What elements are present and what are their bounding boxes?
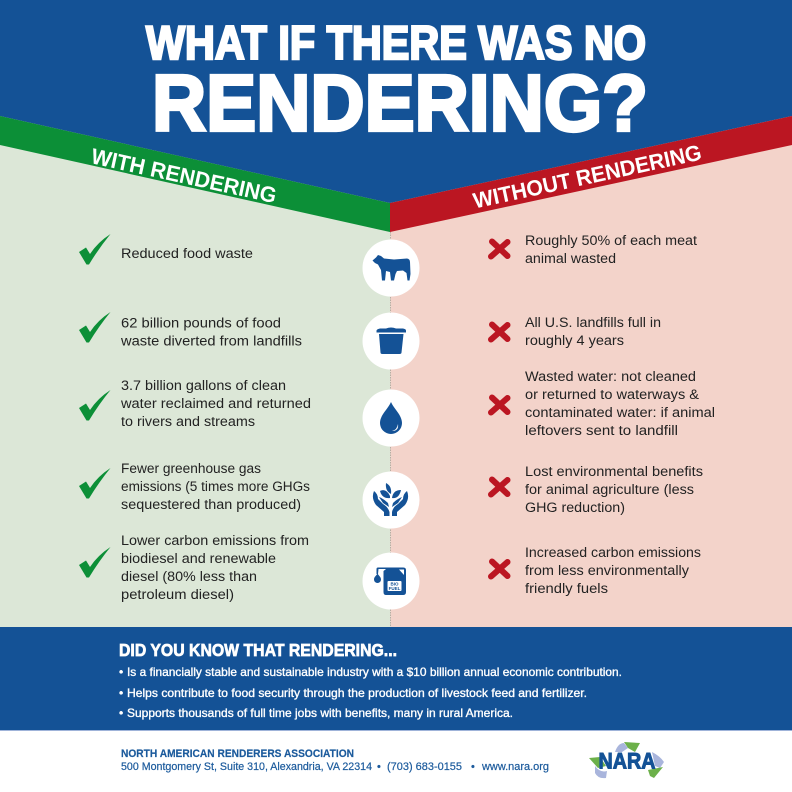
icon: cross 1 [491, 242, 508, 256]
text block: reduced food waste: Reduced food waste [121, 246, 253, 261]
bullet: jobs: Supports thousands of full time jobs with benefits, many in rural America. [127, 706, 513, 720]
text block: meat wasted: Roughly 50% of each meat [525, 233, 697, 248]
icon: check 1 [79, 234, 110, 264]
text block: lower carbon: petroleum diesel) [121, 587, 234, 602]
text block: landfill diversion: 62 billion pounds of food [121, 316, 281, 330]
bullet: food security: • [119, 686, 123, 700]
text block: lost benefits [525, 464, 703, 515]
text block: wasted water [525, 369, 715, 438]
bullet: jobs: • [119, 706, 123, 720]
text block: wasted water: leftovers sent to landfill [525, 423, 678, 438]
text block: meat wasted [525, 233, 697, 266]
panel: without rendering background [390, 116, 792, 628]
text block: wasted water: Wasted water: not cleaned [525, 369, 696, 384]
text block: lost benefits: GHG reduction) [525, 500, 625, 515]
icon: bio fuel jug: BIO [390, 582, 399, 586]
icon: bio fuel jug [362, 552, 420, 610]
icon: check 5 [79, 547, 110, 578]
text block: wasted water: or returned to waterways & [525, 387, 699, 402]
footer contact: • [471, 761, 475, 773]
text block: meat wasted: animal wasted [525, 251, 616, 266]
title: WHAT IF THERE WAS NO [146, 16, 646, 69]
text block: landfill diversion [120, 316, 302, 348]
text block: lost benefits: for animal agriculture (less [525, 482, 694, 497]
logo: NARA: NARA [598, 748, 656, 774]
text block: clean water: water reclaimed and returned [120, 396, 311, 411]
icon: check 4 [79, 468, 110, 498]
text block: greenhouse gas: Fewer greenhouse gas [121, 461, 261, 476]
title: RENDERING? [152, 58, 648, 148]
icon: check 2 [79, 312, 110, 342]
icon: cross 3 [491, 398, 508, 412]
icon: bio fuel jug: FUEL [389, 586, 401, 591]
text block: lower carbon: diesel (80% less than [121, 569, 257, 584]
text block: increased carbon [525, 545, 701, 596]
text block: landfill diversion: waste diverted from landfills [120, 334, 302, 348]
title [146, 16, 648, 148]
heading: did you know: DID YOU KNOW THAT RENDERING... [119, 640, 397, 660]
footer contact: (703) 683-0155 [387, 761, 462, 773]
footer contact [121, 748, 549, 773]
footer contact: • [377, 761, 381, 773]
icon: cross 2 [491, 324, 508, 340]
banner: with rendering [0, 116, 390, 232]
banner: without rendering: WITHOUT RENDERING [471, 140, 704, 213]
text block: clean water [120, 378, 311, 429]
icon: water drop [362, 390, 420, 446]
text block: lower carbon [121, 533, 309, 602]
bullet: food security: Helps contribute to food security through the production of livestock feed and fertilizer. [127, 686, 587, 700]
footer contact: www.nara.org [481, 761, 549, 773]
icon: cross 5 [491, 562, 508, 576]
icon: trash bin [362, 312, 420, 370]
icon: check 3 [79, 390, 110, 420]
text block: increased carbon: from less environmentally [525, 563, 689, 578]
text block: landfills full: All U.S. landfills full in [525, 315, 661, 330]
text block: lower carbon: biodiesel and renewable [121, 551, 276, 566]
bullet: financially stable: Is a financially stable and sustainable industry with a $10 billion annual economic contribution. [127, 665, 622, 679]
text block: wasted water: contaminated water: if animal [525, 405, 715, 420]
logo: NARA [589, 742, 664, 778]
text block: clean water: 3.7 billion gallons of clean [121, 378, 286, 393]
panel: with rendering background [0, 116, 390, 628]
icon: cross 4 [491, 480, 508, 494]
footer contact: 500 Montgomery St, Suite 310, Alexandria, VA 22314 [121, 761, 372, 773]
icon: hands and leaves [362, 472, 420, 528]
text block: clean water: to rivers and streams [121, 414, 255, 429]
text block: greenhouse gas: sequestered than produced) [121, 497, 301, 512]
text block: lower carbon: Lower carbon emissions from [121, 533, 309, 548]
text block: landfills full [525, 315, 661, 348]
banner: with rendering: WITH RENDERING [89, 143, 279, 208]
text block: greenhouse gas [121, 461, 310, 512]
text block: increased carbon: friendly fuels [525, 581, 608, 596]
panel: did you know [0, 627, 792, 730]
bullet: financially stable: • [119, 665, 123, 679]
icon: cow [362, 240, 420, 296]
text block: increased carbon: Increased carbon emissions [525, 545, 701, 560]
text block: landfills full: roughly 4 years [525, 333, 624, 348]
text block: greenhouse gas: emissions (5 times more GHGs [121, 479, 310, 494]
text block: lost benefits: Lost environmental benefits [525, 464, 703, 479]
footer contact: NORTH AMERICAN RENDERERS ASSOCIATION [121, 748, 354, 760]
header background [0, 0, 792, 203]
banner: without rendering [390, 116, 792, 232]
